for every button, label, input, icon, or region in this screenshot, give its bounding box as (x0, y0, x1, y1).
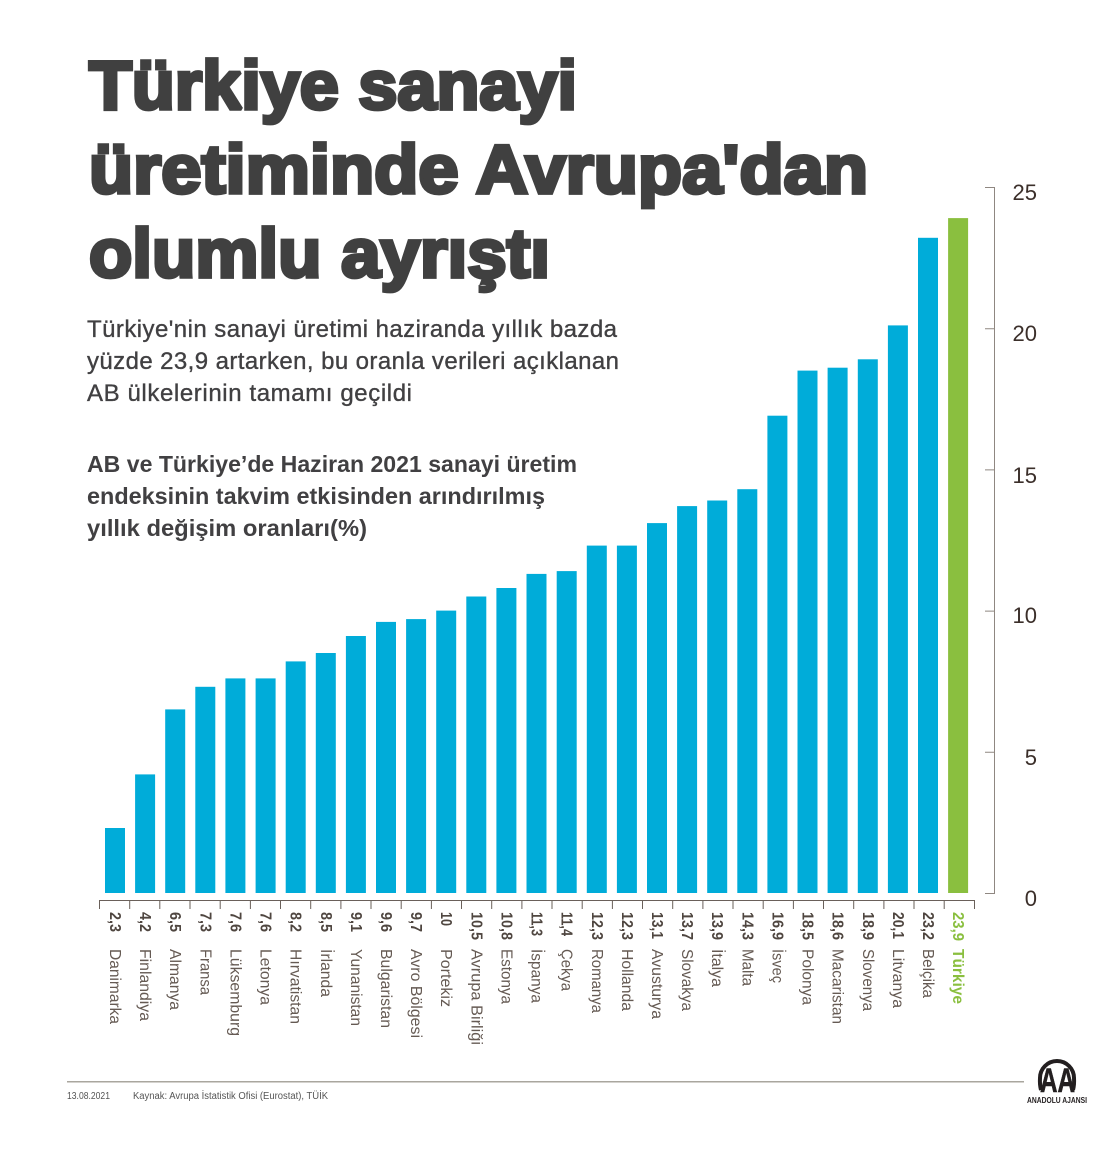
bar chart (100, 180, 1037, 1045)
text block: summary paragraph (87, 316, 619, 407)
country labels: Türkiye (949, 949, 966, 1004)
value labels: 7,6 (257, 912, 274, 932)
footer: source: Kaynak: Avrupa İstatistik Ofisi (Eurostat), TÜİK (133, 1089, 328, 1102)
text block: summary paragraph: Türkiye'nin sanayi üretimi haziranda yıllık bazda (87, 316, 618, 343)
value labels: 9,7 (407, 912, 424, 932)
value labels: 11,4 (558, 912, 575, 936)
country labels: Hırvatistan (287, 949, 304, 1024)
value labels: 10 (437, 912, 454, 926)
right value axis: 10 (1013, 603, 1037, 628)
country labels: Letonya (257, 949, 274, 1005)
value labels: 13,7 (678, 912, 695, 940)
value labels: 8,5 (317, 912, 334, 932)
title: Türkiye sanayi (89, 47, 577, 124)
value labels: 7,3 (196, 912, 213, 932)
right value axis: 15 (1013, 463, 1037, 488)
value labels: 11,3 (528, 912, 544, 936)
logo: Anadolu Ajansı: AA (1040, 1062, 1075, 1100)
right value axis: 25 (1013, 180, 1037, 205)
value labels: 16,9 (768, 912, 785, 940)
bottom category axis (100, 900, 974, 909)
country labels: Slovakya (678, 949, 695, 1011)
value labels: 7,6 (226, 912, 243, 932)
country labels: Almanya (166, 949, 183, 1010)
right value axis (985, 180, 1037, 911)
country labels: Hollanda (618, 949, 635, 1011)
logo: Anadolu Ajansı: ANADOLU AJANSI (1027, 1096, 1087, 1105)
value labels: 23,2 (919, 912, 936, 940)
bars: EU countries (105, 238, 938, 893)
country labels: Finlandiya (136, 949, 153, 1021)
footer: date: 13.08.2021 (67, 1091, 110, 1102)
country labels: Avrupa Birliği (467, 949, 484, 1045)
value labels: 12,3 (618, 912, 635, 940)
country labels: İspanya (528, 949, 546, 1003)
country labels: İsveç (768, 949, 787, 983)
value labels: 8,2 (287, 912, 304, 932)
value labels: 6,5 (166, 912, 183, 932)
value labels: 14,3 (738, 912, 755, 940)
country labels: Slovenya (859, 949, 876, 1011)
title: olumlu ayrıştı (89, 215, 550, 292)
country labels: Yunanistan (347, 949, 364, 1026)
right value axis: 20 (1013, 321, 1037, 346)
value labels: 10,8 (497, 912, 514, 940)
bar: Türkiye highlighted (948, 218, 968, 893)
country labels: Portekiz (437, 949, 454, 1007)
country labels: Malta (738, 949, 755, 986)
country labels: İtalya (708, 949, 727, 987)
title (89, 47, 868, 292)
country labels: Çekya (558, 949, 575, 991)
value labels: 10,5 (467, 912, 484, 940)
value labels: 18,6 (829, 912, 846, 940)
value labels (106, 912, 966, 941)
country labels (106, 949, 966, 1045)
country labels: Bulgaristan (377, 949, 394, 1028)
value labels: 9,1 (347, 912, 364, 932)
country labels: Avro Bölgesi (407, 949, 424, 1038)
text block: summary paragraph: AB ülkelerinin tamamı geçildi (87, 380, 412, 407)
value labels: 9,6 (377, 912, 394, 932)
country labels: Avusturya (648, 949, 665, 1019)
country labels: Polonya (798, 949, 816, 1005)
value labels: 13,1 (648, 912, 665, 939)
value labels: 20,1 (889, 912, 906, 939)
country labels: Litvanya (889, 949, 906, 1008)
title: üretiminde Avrupa'dan (89, 131, 868, 208)
value labels: 4,2 (136, 912, 153, 932)
country labels: İrlanda (317, 949, 336, 997)
country labels: Belçika (919, 949, 936, 998)
chart heading: yıllık değişim oranları(%) (87, 515, 367, 541)
country labels: Fransa (196, 949, 213, 995)
value labels: 18,9 (859, 912, 876, 940)
value labels: 2,3 (106, 912, 123, 932)
right value axis: 5 (1025, 745, 1037, 770)
text block: summary paragraph: yüzde 23,9 artarken, bu oranla verileri açıklanan (87, 348, 619, 375)
value labels: 12,3 (588, 912, 605, 940)
country labels: Macaristan (829, 949, 846, 1024)
country labels: Estonya (497, 949, 514, 1004)
value labels: 18,5 (798, 912, 816, 940)
country labels: Danimarka (106, 949, 123, 1024)
chart heading: AB ve Türkiye’de Haziran 2021 sanayi üretim (87, 451, 577, 477)
value labels: 13,9 (708, 912, 725, 940)
country labels: Lüksemburg (226, 949, 243, 1036)
country labels: Romanya (588, 949, 605, 1013)
chart heading: endeksinin takvim etkisinden arındırılmış (87, 483, 545, 509)
right value axis: 0 (1025, 886, 1037, 911)
logo: Anadolu Ajansı (1027, 1061, 1087, 1105)
value labels: 23,9 (949, 912, 966, 941)
footer rule (67, 1081, 1024, 1082)
chart heading (87, 451, 577, 541)
